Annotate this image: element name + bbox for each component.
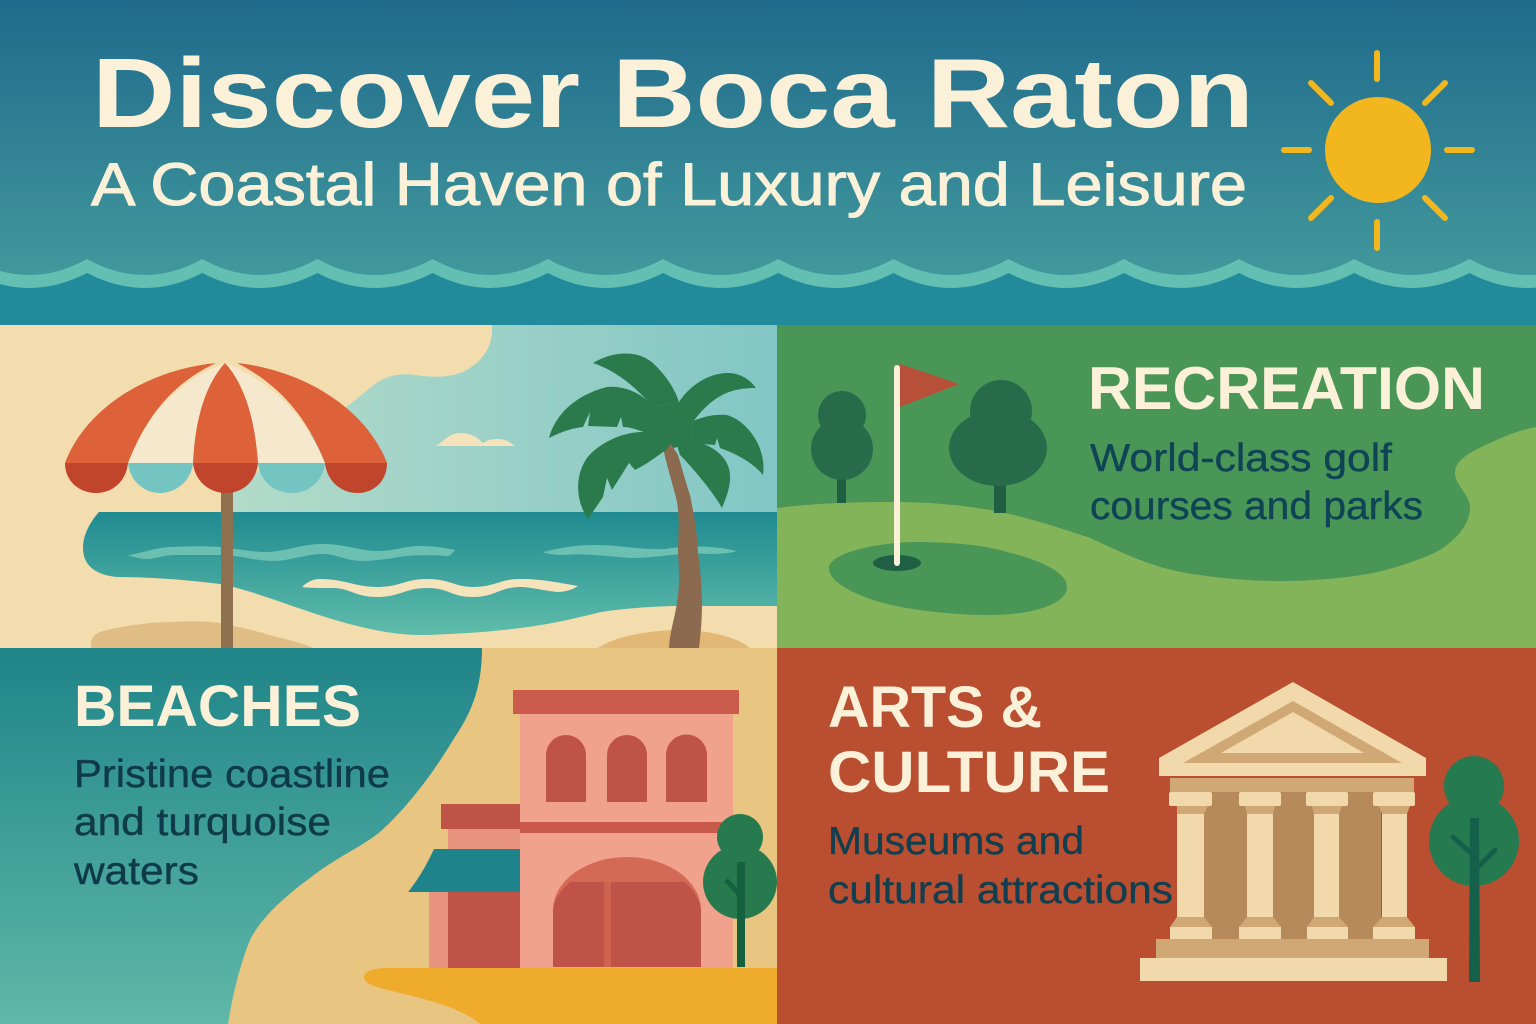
panel: beaches [0,648,777,1024]
text: arts description: Museums and [828,820,1084,863]
ground [364,968,777,1024]
text: arts description: cultural attractions [828,869,1173,912]
column 2 [1239,792,1281,939]
panel: recreation [777,325,1536,648]
panel: beach scene [0,325,777,648]
icon: sun [1284,53,1472,248]
title: Discover Boca Raton [92,38,1254,148]
icon: tree [1429,756,1519,982]
text: recreation description [1090,437,1423,528]
heading: beaches: BEACHES [74,674,361,739]
text: beaches description: and turquoise [74,801,331,844]
icon: building [408,690,739,968]
text: beaches description: waters [73,850,199,893]
subtitle: A Coastal Haven of Luxury and Leisure [91,151,1247,218]
icon: beach umbrella [65,363,387,648]
panel: header [0,0,1536,325]
sea wave highlights [128,544,737,597]
text: beaches description [73,753,390,893]
fairway [777,427,1536,648]
icon: tree [703,814,777,967]
panel: arts and culture [777,648,1536,1024]
text: arts description [828,820,1173,912]
heading: arts and culture [828,675,1110,805]
heading: arts and culture: ARTS & [828,675,1042,740]
wave band [0,259,1536,325]
column 3 [1306,792,1348,939]
sky [233,325,777,512]
teal water shape [0,648,482,1024]
icon: museum [1140,682,1447,981]
icon: trees [811,380,1047,513]
icon: palm tree [549,353,763,648]
column 4 [1373,792,1415,939]
putting green [829,542,1067,615]
text: recreation description: World-class golf [1090,437,1392,480]
sand mounds [91,621,313,648]
text: beaches description: Pristine coastline [74,753,390,796]
heading: arts and culture: CULTURE [828,740,1110,805]
sea [83,512,777,635]
text: recreation description: courses and parks [1090,485,1423,528]
column 1 [1169,792,1212,939]
cloud [436,433,515,446]
heading: recreation: RECREATION [1088,355,1485,422]
icon: golf flag [873,364,959,571]
